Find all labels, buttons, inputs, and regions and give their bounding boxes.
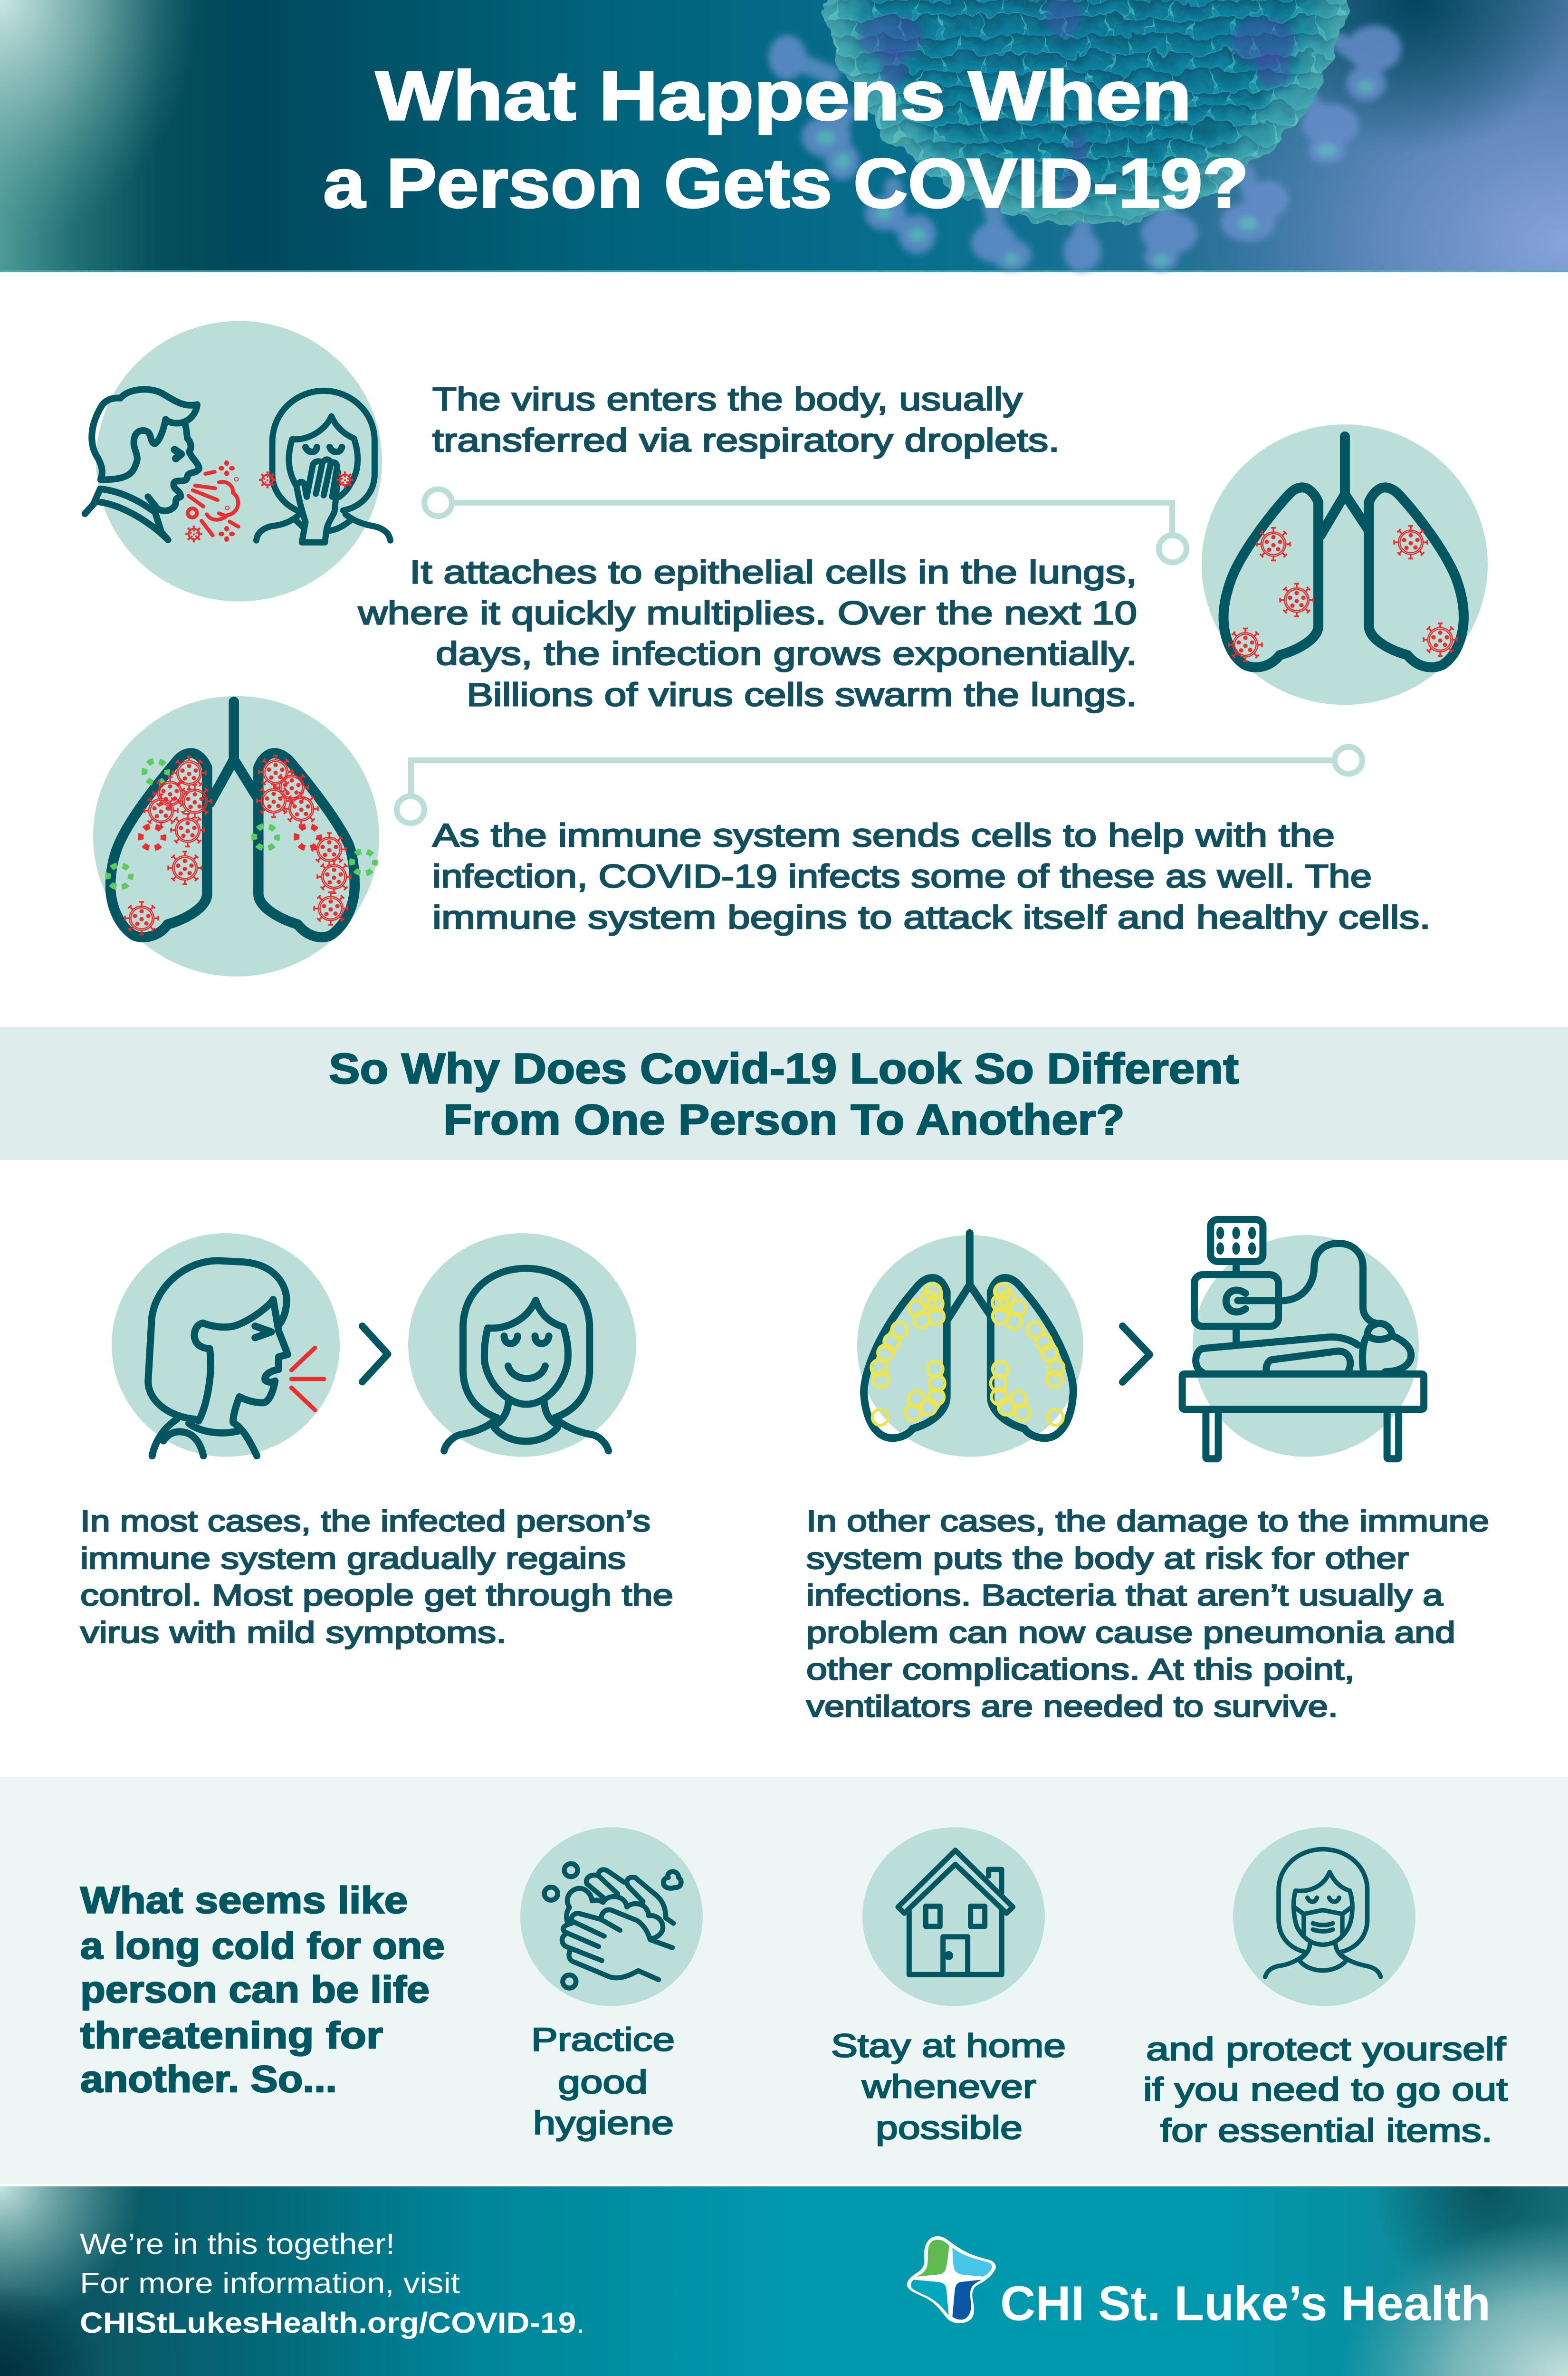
- title: a Person Gets COVID-19?: [323, 145, 1249, 222]
- caption: hygiene: good: [558, 2064, 648, 2100]
- footer text: CHIStLukesHealth.org/COVID-19 .: [80, 2307, 585, 2339]
- connector 2: [397, 747, 1362, 823]
- coughing woman: [148, 1261, 288, 1456]
- callout: long cold: a long cold for one: [80, 1925, 445, 1966]
- callout: long cold: threatening for: [80, 2014, 383, 2056]
- caption: stay home: Stay at home: [831, 2027, 1066, 2064]
- panel: prevention: [0, 1776, 1568, 2184]
- icon: house: [862, 1827, 1045, 2006]
- callout: long cold: another. So...: [80, 2058, 337, 2100]
- text block: immune system: immune system begins to attack itself and healthy cells.: [432, 899, 1431, 936]
- text block: attaches to epithelial cells: where it quickly multiplies. Over the next 10: [358, 594, 1137, 632]
- virus illustration: [768, 0, 1402, 272]
- title: [323, 57, 1249, 222]
- logo mark: [907, 2236, 996, 2323]
- text block: attaches to epithelial cells: It attaches to epithelial cells in the lungs,: [410, 554, 1137, 590]
- text block: most cases: immune system gradually regains: [80, 1542, 626, 1575]
- text block: most cases: control. Most people get through the: [80, 1579, 673, 1612]
- text block: other cases: problem can now cause pneumonia and: [806, 1616, 1455, 1649]
- text block: most cases: virus with mild symptoms.: [80, 1616, 507, 1649]
- text block: attaches to epithelial cells: days, the infection grows exponentially.: [436, 635, 1137, 672]
- callout: long cold: person can be life: [80, 1968, 430, 2011]
- caption: stay home: [831, 2027, 1066, 2146]
- caption: hygiene: Practice: [531, 2021, 675, 2058]
- icon: lungs with few virus cells: [1202, 424, 1488, 705]
- text block: attaches to epithelial cells: [358, 554, 1137, 713]
- caption: hygiene: [531, 2021, 675, 2141]
- caption: protect yourself: for essential items.: [1160, 2112, 1492, 2149]
- text block: virus enters: transferred via respiratory droplets.: [432, 422, 1060, 459]
- icon: person coughing droplets at another person: [85, 321, 391, 602]
- text block: most cases: In most cases, the infected person’s: [80, 1505, 650, 1538]
- icon: lungs with bacteria to ventilator patient: [857, 1219, 1424, 1459]
- text block: immune system: As the immune system sends cells to help with the: [432, 817, 1335, 853]
- callout: long cold: [80, 1879, 445, 2100]
- caption: hygiene: hygiene: [533, 2105, 674, 2141]
- text block: immune system: infection, COVID-19 infects some of these as well. The: [432, 858, 1372, 894]
- man coughing: [85, 389, 199, 540]
- section heading banner: From One Person To Another?: [443, 1096, 1125, 1144]
- text block: attaches to epithelial cells: Billions of virus cells swarm the lungs.: [467, 676, 1137, 713]
- callout: long cold: What seems like: [80, 1879, 408, 1921]
- caption: stay home: possible: [876, 2109, 1023, 2146]
- connector 1: [424, 489, 1186, 562]
- logo name: CHI St. Luke’s Health: [1000, 2276, 1491, 2331]
- text block: virus enters: The virus enters the body, usually: [432, 381, 1023, 418]
- cough droplets: [188, 472, 239, 536]
- arrow: [1122, 1326, 1150, 1382]
- ventilator and patient: [1182, 1219, 1424, 1459]
- text block: other cases: In other cases, the damage to the immune: [806, 1505, 1489, 1538]
- caption: protect yourself: if you need to go out: [1143, 2071, 1508, 2108]
- text block: other cases: [806, 1505, 1489, 1724]
- text block: other cases: other complications. At this point,: [806, 1653, 1355, 1686]
- text block: other cases: ventilators are needed to survive.: [806, 1690, 1338, 1724]
- cough lines: [291, 1348, 324, 1410]
- footer text: For more information, visit: [80, 2267, 460, 2299]
- arrow: [362, 1326, 388, 1382]
- lungs: [864, 1233, 1073, 1438]
- icon: lungs swarmed with virus and immune cells: [93, 696, 379, 977]
- header banner: [0, 0, 1568, 272]
- footer text: [80, 2228, 585, 2339]
- caption: protect yourself: [1143, 2031, 1508, 2149]
- title: What Happens When: [375, 57, 1192, 135]
- text block: virus enters: [432, 381, 1060, 459]
- section heading banner: [0, 1027, 1568, 1160]
- text block: other cases: infections. Bacteria that aren’t usually a: [806, 1579, 1444, 1612]
- smiling woman: [444, 1268, 609, 1451]
- text block: most cases: [80, 1505, 673, 1649]
- section heading banner: So Why Does Covid-19 Look So Different: [329, 1045, 1239, 1092]
- text block: immune system: [432, 817, 1431, 936]
- caption: protect yourself: and protect yourself: [1146, 2031, 1506, 2067]
- bacteria rings: [871, 1284, 1064, 1425]
- footer text: We’re in this together!: [80, 2228, 395, 2261]
- icon: infected woman coughing to smiling recovered woman: [112, 1233, 636, 1457]
- footer: [0, 2186, 1568, 2376]
- text block: other cases: system puts the body at risk for other: [806, 1542, 1409, 1575]
- icon: washing hands: [520, 1827, 703, 2006]
- icon: woman wearing mask: [1233, 1827, 1415, 2006]
- caption: stay home: whenever: [861, 2068, 1036, 2105]
- woman covering mouth: [256, 391, 391, 542]
